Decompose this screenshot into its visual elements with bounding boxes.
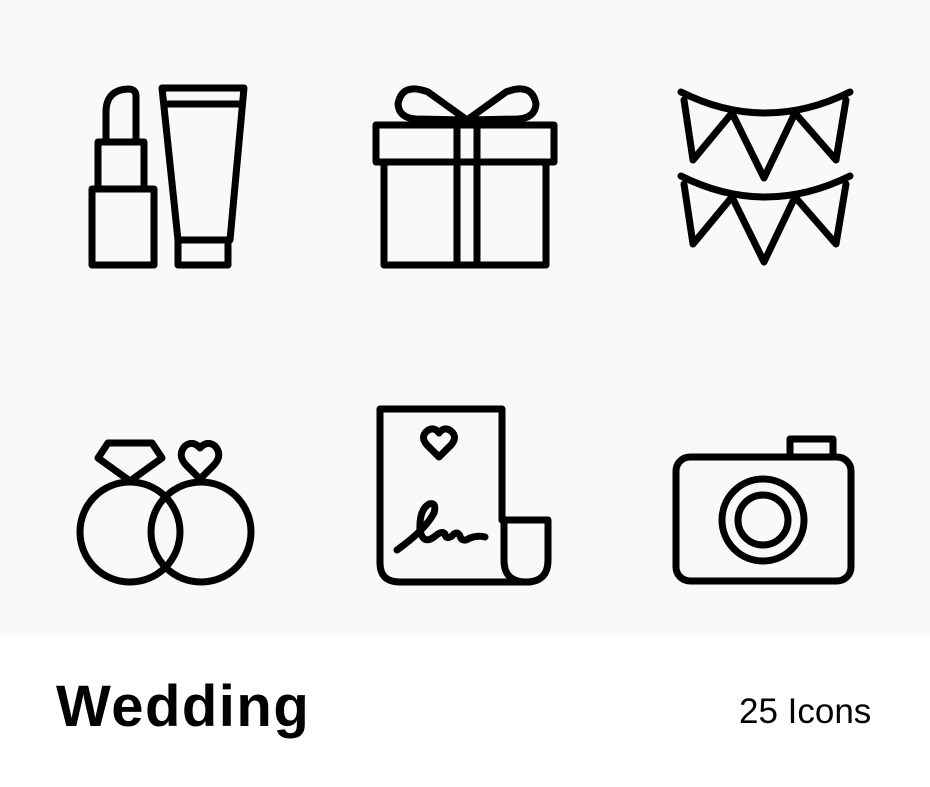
icon: marriage certificate [380,409,548,582]
icon: gift box [376,89,554,265]
icon: lipstick and tube [92,88,244,265]
icon: rings [80,443,251,582]
subtitle: icon count: 25 Icons [739,692,871,731]
icon: camera [676,439,851,581]
title: Wedding [56,674,310,739]
icon: bunting [681,92,850,262]
